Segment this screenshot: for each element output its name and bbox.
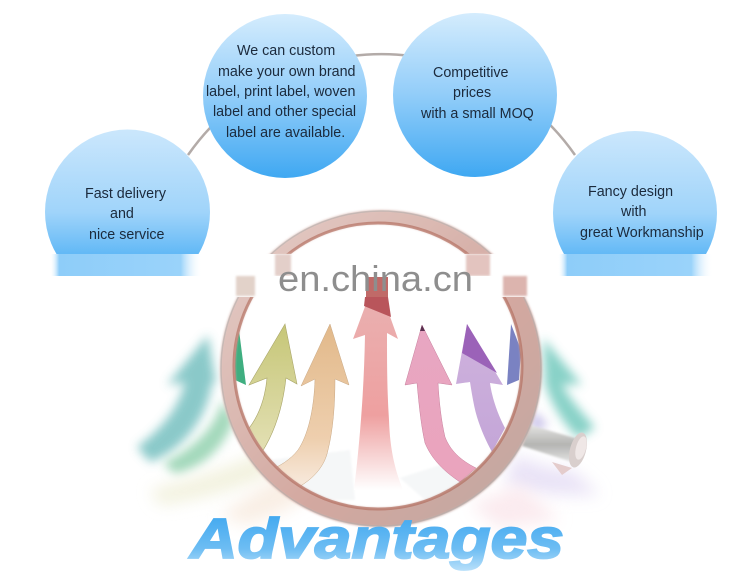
chart texture	[274, 452, 458, 499]
panel: fast delivery	[45, 130, 210, 294]
panel: custom labels: We can custom	[237, 43, 335, 59]
panel: competitive prices: Competitive	[433, 65, 509, 81]
panel: fast delivery: and	[110, 206, 134, 222]
panel: fancy design: Fancy design	[588, 184, 673, 200]
panel: custom labels: label and other special	[213, 104, 356, 120]
panel: fast delivery: Fast delivery	[85, 186, 167, 202]
arrow: olive	[246, 324, 297, 452]
panel: custom labels: label, print label, woven	[206, 84, 355, 100]
arrow: blue	[507, 324, 521, 385]
panel: fancy design	[553, 131, 717, 254]
lens interior	[233, 222, 523, 510]
panel: competitive prices: prices	[453, 85, 491, 101]
ring	[220, 210, 542, 527]
arrows inside the lens	[235, 297, 520, 499]
connecting arc	[188, 54, 575, 155]
watermark text: en.china.cn	[278, 258, 473, 299]
panel: competitive prices: with a small MOQ	[420, 106, 534, 122]
panel: fancy design: with	[620, 204, 646, 220]
watermark band	[0, 254, 749, 297]
panel: custom labels: make your own brand	[218, 64, 356, 80]
panel: custom labels: label are available.	[226, 125, 345, 141]
blurred background arrows	[137, 335, 600, 528]
arrow: red center	[353, 306, 400, 484]
magnifying glass	[220, 210, 590, 527]
arrow tip: pink dark	[420, 325, 425, 331]
arrow tip: purple dark	[462, 324, 497, 373]
arrow: orange	[270, 324, 349, 488]
panel: custom labels	[203, 14, 367, 178]
arrow: pink	[405, 325, 476, 482]
panel: fast delivery: nice service	[89, 227, 165, 243]
arrow tip: dark red	[364, 297, 391, 317]
arrow: purple	[456, 324, 505, 452]
panel: fancy design: great Workmanship	[580, 225, 704, 241]
title: Advantages	[188, 507, 564, 571]
handle	[522, 425, 590, 475]
arrow: green	[235, 332, 246, 385]
panel: competitive prices	[393, 13, 557, 177]
